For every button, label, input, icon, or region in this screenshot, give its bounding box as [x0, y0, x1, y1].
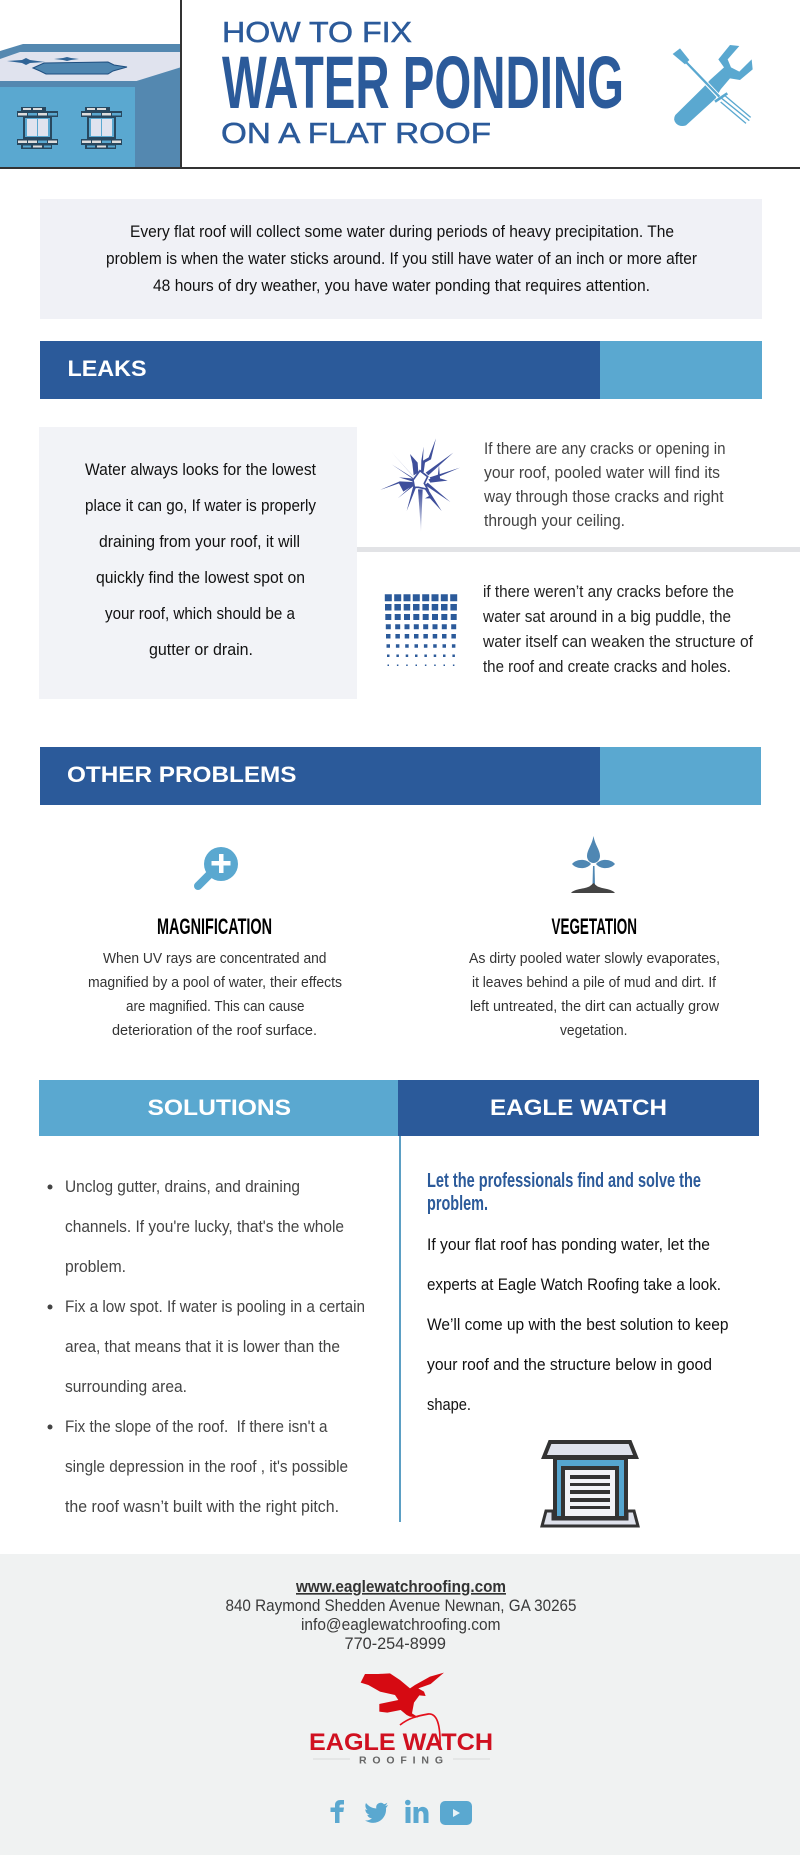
heading: eagle watch: EAGLE WATCH	[490, 1095, 667, 1120]
block: vegetation: vegetation.	[560, 1023, 628, 1039]
small puddles	[7, 57, 79, 65]
panel: leaks explanation	[39, 427, 357, 699]
text: weakened structure: water itself can weaken the structure of	[482, 633, 753, 651]
solution 2: area, that means that it is lower than the	[65, 1338, 340, 1356]
icon: roof crack	[380, 438, 460, 532]
icon: garage	[542, 1442, 638, 1526]
roofing label: ROOFING	[359, 1754, 443, 1766]
solution 3	[48, 1418, 348, 1516]
pond	[33, 62, 127, 74]
heading: other problems	[40, 747, 761, 805]
header baseline rule	[0, 167, 800, 169]
block: vegetation: left untreated, the dirt can actually grow	[470, 999, 720, 1015]
panel: leaks explanation: your roof, which should be a	[105, 605, 296, 623]
solution 3: the roof wasn’t built with the right pitch.	[65, 1498, 339, 1516]
social icons	[330, 1800, 472, 1825]
block: vegetation: As dirty pooled water slowly evaporates,	[469, 951, 720, 967]
panel: leaks explanation: quickly find the lowest spot on	[96, 569, 305, 587]
text: weakened structure: water sat around in a big puddle, the	[482, 608, 731, 626]
icon: plant	[571, 836, 615, 893]
block: vegetation: VEGETATION	[552, 914, 637, 939]
wordmark: EAGLE WATCH	[309, 1729, 493, 1756]
solution 1	[48, 1178, 344, 1276]
block: vegetation: it leaves behind a pile of mud and dirt. If	[472, 975, 717, 991]
rule right	[453, 1758, 490, 1760]
solution 1: channels. If you're lucky, that's the whole	[65, 1218, 344, 1236]
header divider	[180, 0, 182, 168]
rule left	[313, 1758, 350, 1760]
heading: solutions	[39, 1080, 398, 1136]
icon: youtube	[440, 1801, 472, 1825]
text: eagle watch pitch: If your flat roof has ponding water, let the	[427, 1236, 710, 1254]
solution 2: Fix a low spot. If water is pooling in a certain	[65, 1298, 365, 1316]
solution 1: problem.	[65, 1258, 126, 1276]
heading: other problems: OTHER PROBLEMS	[67, 762, 296, 787]
text: eagle watch pitch: your roof and the structure below in good	[427, 1356, 712, 1374]
block: magnification: magnified by a pool of water, their effects	[88, 975, 342, 991]
text: cracks: through your ceiling.	[484, 512, 625, 530]
block: magnification: MAGNIFICATION	[157, 914, 272, 939]
icon: twitter	[365, 1803, 388, 1823]
icon: magnifier	[198, 847, 238, 886]
solution 2: surrounding area.	[65, 1378, 187, 1396]
block: magnification: deterioration of the roof surface.	[112, 1023, 317, 1039]
text: eagle watch pitch	[427, 1236, 728, 1414]
text: weakened structure: if there weren’t any cracks before the	[483, 583, 734, 601]
panel: leaks explanation: gutter or drain.	[149, 641, 253, 659]
window left	[17, 107, 58, 149]
solution 3: Fix the slope of the roof. If there isn't a	[65, 1418, 328, 1436]
panel: leaks explanation: place it can go, If water is properly	[85, 497, 317, 515]
block: magnification: When UV rays are concentrated and	[103, 951, 326, 967]
block: magnification: are magnified. This can cause	[126, 999, 304, 1015]
contact details: 770-254-8999	[344, 1634, 446, 1653]
header	[0, 0, 800, 169]
contact details	[226, 1578, 576, 1653]
heading: solutions: SOLUTIONS	[148, 1095, 291, 1120]
icon: facebook	[330, 1800, 344, 1823]
illustration: building with ponding roof	[0, 44, 180, 167]
solution 3: single depression in the roof , it's possible	[65, 1458, 348, 1476]
text: cracks: your roof, pooled water will find its	[484, 464, 720, 482]
logo: eagle watch roofing	[309, 1673, 493, 1766]
column divider	[399, 1136, 401, 1522]
panel: intro: 48 hours of dry weather, you have water ponding that requires attention.	[153, 277, 650, 295]
text: cracks	[483, 440, 726, 530]
subheading: professionals	[427, 1170, 701, 1215]
text: cracks: If there are any cracks or opening in	[484, 440, 726, 458]
eagle mark	[361, 1673, 444, 1747]
contact details: info@eaglewatchroofing.com	[301, 1615, 500, 1634]
title line 3: ON A FLAT ROOF	[221, 118, 491, 150]
text: weakened structure: the roof and create cracks and holes.	[483, 658, 731, 676]
text: eagle watch pitch: experts at Eagle Watch Roofing take a look.	[427, 1276, 721, 1294]
contact details: www.eaglewatchroofing.com	[295, 1578, 506, 1596]
heading: leaks	[40, 341, 762, 399]
contact details: 840 Raymond Shedden Avenue Newnan, GA 30265	[226, 1596, 576, 1615]
panel: leaks explanation: Water always looks for the lowest	[85, 461, 316, 479]
icon: crossed tools	[673, 45, 753, 126]
block: magnification	[88, 914, 342, 1039]
text: eagle watch pitch: shape.	[427, 1396, 471, 1414]
panel: leaks explanation: draining from your roof, it will	[99, 533, 300, 551]
panel: intro: problem is when the water sticks around. If you still have water of an inch or more after	[106, 250, 697, 268]
solution 2	[48, 1298, 365, 1396]
icon: linkedin	[405, 1800, 428, 1823]
text: eagle watch pitch: We’ll come up with the best solution to keep	[427, 1316, 728, 1334]
solution 1: Unclog gutter, drains, and draining	[65, 1178, 300, 1196]
divider	[357, 547, 800, 552]
subheading: professionals: Let the professionals find and solve the	[427, 1170, 701, 1192]
panel: footer	[0, 1554, 800, 1855]
window right	[81, 107, 122, 149]
icon: fading dot grid	[385, 594, 457, 666]
heading: leaks: LEAKS	[68, 356, 146, 381]
title line 1: HOW TO FIX	[222, 17, 412, 49]
list: solutions	[48, 1178, 365, 1516]
panel: intro	[40, 199, 762, 319]
block: vegetation	[469, 914, 720, 1039]
text: weakened structure	[482, 583, 753, 676]
text: cracks: way through those cracks and right	[483, 488, 724, 506]
subheading: professionals: problem.	[427, 1193, 488, 1215]
heading: eagle watch	[398, 1080, 759, 1136]
panel: intro: Every flat roof will collect some water during periods of heavy precipitation. The	[130, 223, 674, 241]
